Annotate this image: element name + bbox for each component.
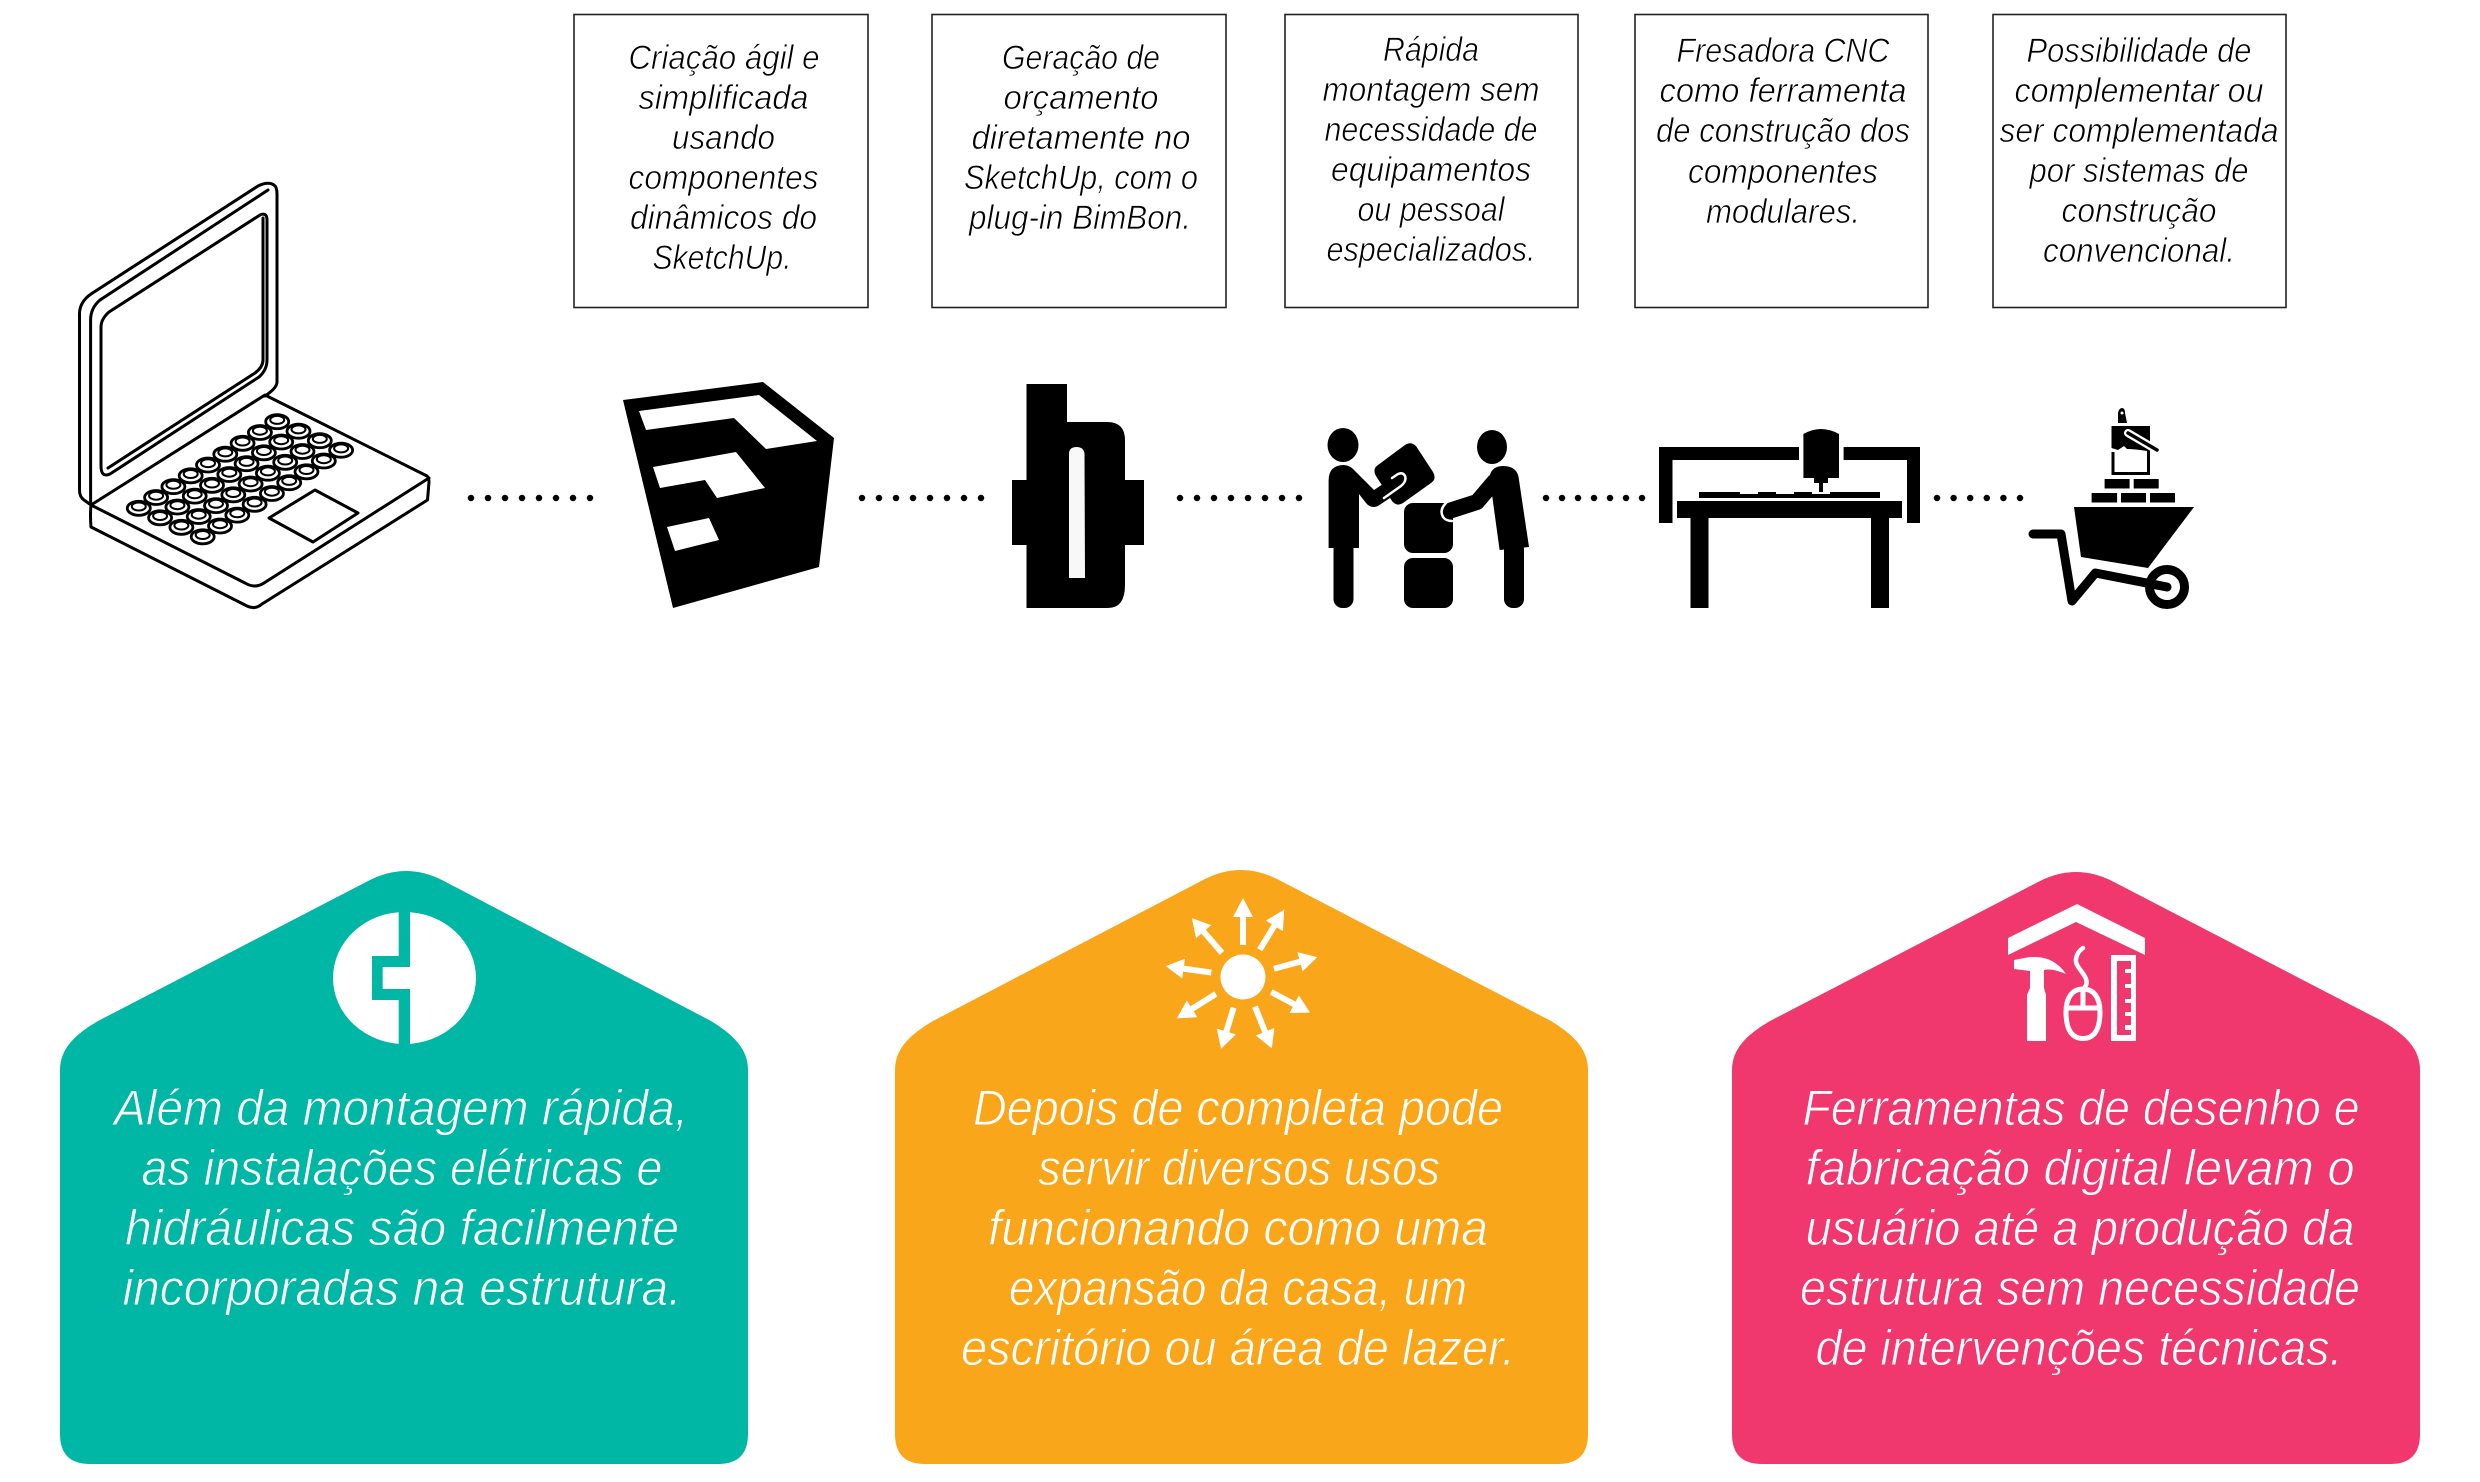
text box: Fresadora CNC: como ferramenta (1660, 72, 1906, 110)
icon: house roof with hammer, mouse and ruler (2008, 904, 2145, 1041)
text box: Rápida montagem: especializados. (1326, 231, 1536, 269)
text: orange panel: servir diversos usos (1038, 1140, 1440, 1196)
text box: Criação ágil (574, 14, 868, 308)
house shape (60, 871, 748, 1464)
icon: CNC milling machine (1659, 429, 1920, 608)
text box: Criação ágil: dinâmicos do (630, 199, 817, 237)
text box: Geração de orçamento: orçamento (1004, 79, 1158, 117)
text box: Fresadora CNC: componentes (1688, 153, 1878, 191)
text: pink panel: usuário até a produção da (1806, 1200, 2354, 1256)
text box: Fresadora CNC: modulares. (1706, 193, 1860, 231)
text: pink panel: Ferramentas de desenho e (1802, 1080, 2360, 1136)
panel: pink house (1732, 872, 2420, 1464)
house shape (1732, 872, 2420, 1464)
icon: wheelbarrow with bricks and paint bucket (2033, 408, 2194, 604)
text: teal panel: as instalações elétricas e (142, 1140, 662, 1196)
panel: teal house (60, 871, 748, 1464)
icon: SketchUp cube (623, 382, 834, 608)
text box: Fresadora CNC (1635, 14, 1928, 308)
text: orange panel: Depois de completa pode (973, 1080, 1503, 1136)
text box: Rápida montagem: equipamentos (1331, 151, 1531, 189)
text: orange panel: funcionando como uma (988, 1200, 1488, 1256)
text box: Geração de orçamento (932, 14, 1226, 308)
icon: laptop (80, 183, 429, 608)
text box: Criação ágil: componentes (628, 159, 818, 197)
text box: Possibilidade de complementar: complementar ou (2014, 72, 2264, 110)
icon: plug socket circle (333, 910, 476, 1046)
text box: Possibilidade de complementar: construção (2062, 192, 2216, 230)
text box: Rápida montagem: necessidade de (1324, 111, 1538, 149)
connector dots: laptop to SketchUp (471, 495, 595, 501)
text box: Criação ágil: SketchUp. (652, 239, 792, 277)
text box: Possibilidade de complementar: por sistemas de (2029, 152, 2248, 190)
text box: Rápida montagem (1285, 14, 1578, 308)
text box: Rápida montagem: ou pessoal (1358, 191, 1506, 229)
text box: Geração de orçamento: plug-in BimBon. (968, 199, 1191, 237)
text box: Possibilidade de complementar: ser complementada (2000, 112, 2278, 150)
text box: Possibilidade de complementar (1993, 14, 2286, 308)
house shape (895, 870, 1588, 1464)
icon: two people assembling blocks (1328, 428, 1529, 608)
text: pink panel: estrutura sem necessidade (1800, 1260, 2360, 1316)
connector dots: CNC to wheelbarrow (1937, 495, 2025, 501)
text box: Fresadora CNC: de construção dos (1656, 112, 1910, 150)
text box: Geração de orçamento: diretamente no (972, 119, 1190, 157)
text: pink panel (1800, 1080, 2360, 1376)
text: pink panel: fabricação digital levam o (1806, 1140, 2354, 1196)
text: orange panel (961, 1080, 1515, 1376)
text: teal panel (111, 1080, 688, 1316)
text: teal panel: Além da montagem rápida, (111, 1080, 688, 1136)
text: teal panel: hidráulicas são facilmente (125, 1200, 679, 1256)
connector dots: assembly to CNC (1546, 495, 1645, 501)
text box: Geração de orçamento: Geração de (1002, 39, 1160, 77)
connector dots: SketchUp to BimBon (862, 495, 986, 501)
text box: Criação ágil: Criação ágil e (628, 39, 820, 77)
panel: orange house (895, 870, 1588, 1464)
text box: Geração de orçamento: SketchUp, com o (964, 159, 1198, 197)
text box: Rápida montagem: montagem sem (1322, 71, 1540, 109)
icon: BimBon b logo (1012, 384, 1144, 608)
text box: Criação ágil: simplificada (638, 79, 808, 117)
text box: Criação ágil: usando (672, 119, 775, 157)
text: orange panel: escritório ou área de lazer. (961, 1320, 1515, 1376)
text: pink panel: de intervenções técnicas. (1816, 1320, 2342, 1376)
text: orange panel: expansão da casa, um (1009, 1260, 1467, 1316)
connector dots: BimBon to assembly (1180, 495, 1304, 501)
text box: Possibilidade de complementar: Possibilidade de (2026, 32, 2252, 70)
text box: Rápida montagem: Rápida (1383, 31, 1479, 69)
text box: Fresadora CNC: Fresadora CNC (1676, 32, 1890, 70)
icon: sun with radiating arrows (1164, 898, 1320, 1052)
text box: Possibilidade de complementar: convencional. (2043, 232, 2235, 270)
text: teal panel: incorporadas na estrutura. (122, 1260, 682, 1316)
